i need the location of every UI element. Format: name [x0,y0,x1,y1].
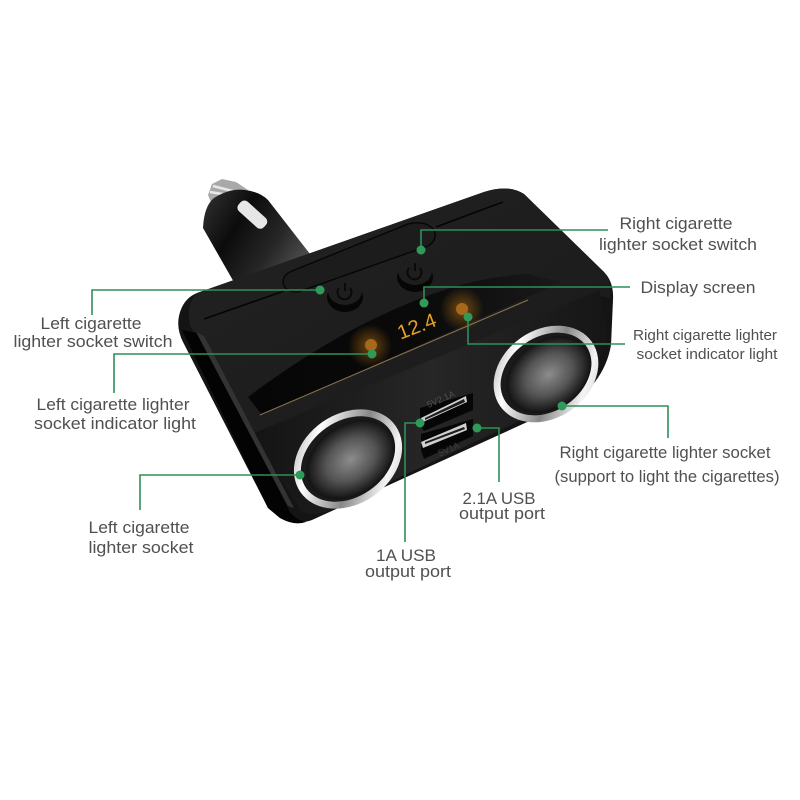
callout: 1A USB port: 1A USB [376,546,436,565]
callout: 2.1A USB port [459,424,545,523]
callout: right socket: Right cigarette lighter socket [560,443,771,462]
callout: 2.1A USB port: 2.1A USB [462,489,536,508]
callout: right indicator light: Right cigarette lighter [633,327,777,344]
callout: display screen: Display screen [640,278,756,297]
callout: right socket switch [416,214,757,254]
lower USB port [421,419,473,459]
callout: left socket [88,470,304,557]
right indicator light [440,287,484,331]
device body [178,188,613,523]
icon: car plug [203,179,310,284]
upper USB port [420,389,473,431]
top grooves [204,202,503,319]
callout: 1A USB port: output port [365,562,451,581]
display screen digits: 12.4 [394,310,440,344]
callout: left indicator light: Left cigarette lighter [36,395,190,414]
callout: left socket: Left cigarette [88,518,190,537]
lower USB port: 5V1A [437,440,461,458]
left indicator light [348,324,392,368]
callout: display screen [420,278,756,308]
callout: right socket [554,402,780,486]
icon: left power button [327,277,363,312]
callout: 1A USB port [365,418,451,581]
callout: left indicator light [34,350,376,433]
callout: right indicator light: socket indicator light [636,346,778,363]
callout: 2.1A USB port: output port [459,504,545,523]
callout: left socket switch: Left cigarette [40,314,142,333]
display lens [248,274,562,415]
callout: right socket switch: Right cigarette [620,214,732,233]
icon: right power button [397,257,433,292]
callout: left socket switch: lighter socket switch [14,332,172,351]
callout: left indicator light: socket indicator light [34,414,196,433]
callout: left socket switch [14,286,324,351]
callout: right socket switch: lighter socket switch [599,235,757,254]
left cigarette socket [275,389,421,529]
callout: left socket: lighter socket [88,538,194,557]
upper USB port: 5V2.1A [425,389,456,410]
button recess [283,223,435,292]
callout: right socket: (support to light the cigarettes) [554,467,780,486]
callout: right indicator light [464,312,778,363]
right cigarette socket [475,306,617,442]
